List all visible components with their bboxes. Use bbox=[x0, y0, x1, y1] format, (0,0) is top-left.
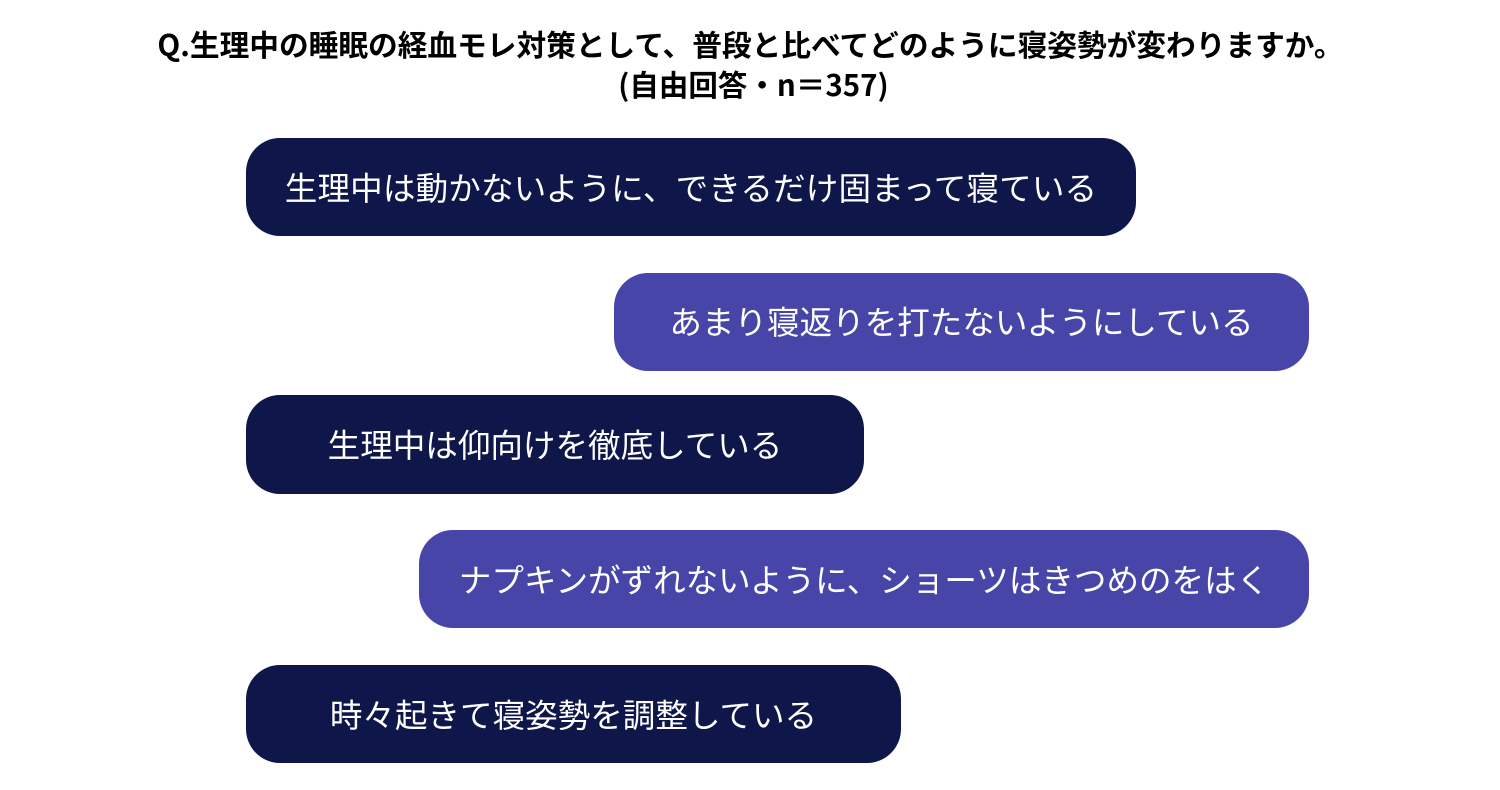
title bbox=[157, 22, 1344, 105]
speech bubble 5: 時々起きて寝姿勢を調整している bbox=[330, 690, 817, 737]
speech bubble 3 bbox=[246, 395, 864, 494]
speech bubble 1: 生理中は動かないように、できるだけ固まって寝ている bbox=[285, 163, 1097, 210]
speech bubble 5 bbox=[246, 665, 901, 763]
title: Q.生理中の睡眠の経血モレ対策として、普段と比べてどのように寝姿勢が変わりますか。 bbox=[157, 22, 1344, 64]
speech bubble 3: 生理中は仰向けを徹底している bbox=[328, 420, 782, 467]
speech bubble 4: ナプキンがずれないように、ショーツはきつめのをはく bbox=[459, 555, 1269, 602]
speech bubble 4 bbox=[419, 530, 1309, 628]
speech bubble 1 bbox=[246, 138, 1136, 236]
speech bubble 2: あまり寝返りを打たないようにしている bbox=[669, 297, 1254, 344]
speech bubble 2 bbox=[614, 273, 1309, 371]
title: (自由回答・n＝357) bbox=[618, 63, 889, 105]
